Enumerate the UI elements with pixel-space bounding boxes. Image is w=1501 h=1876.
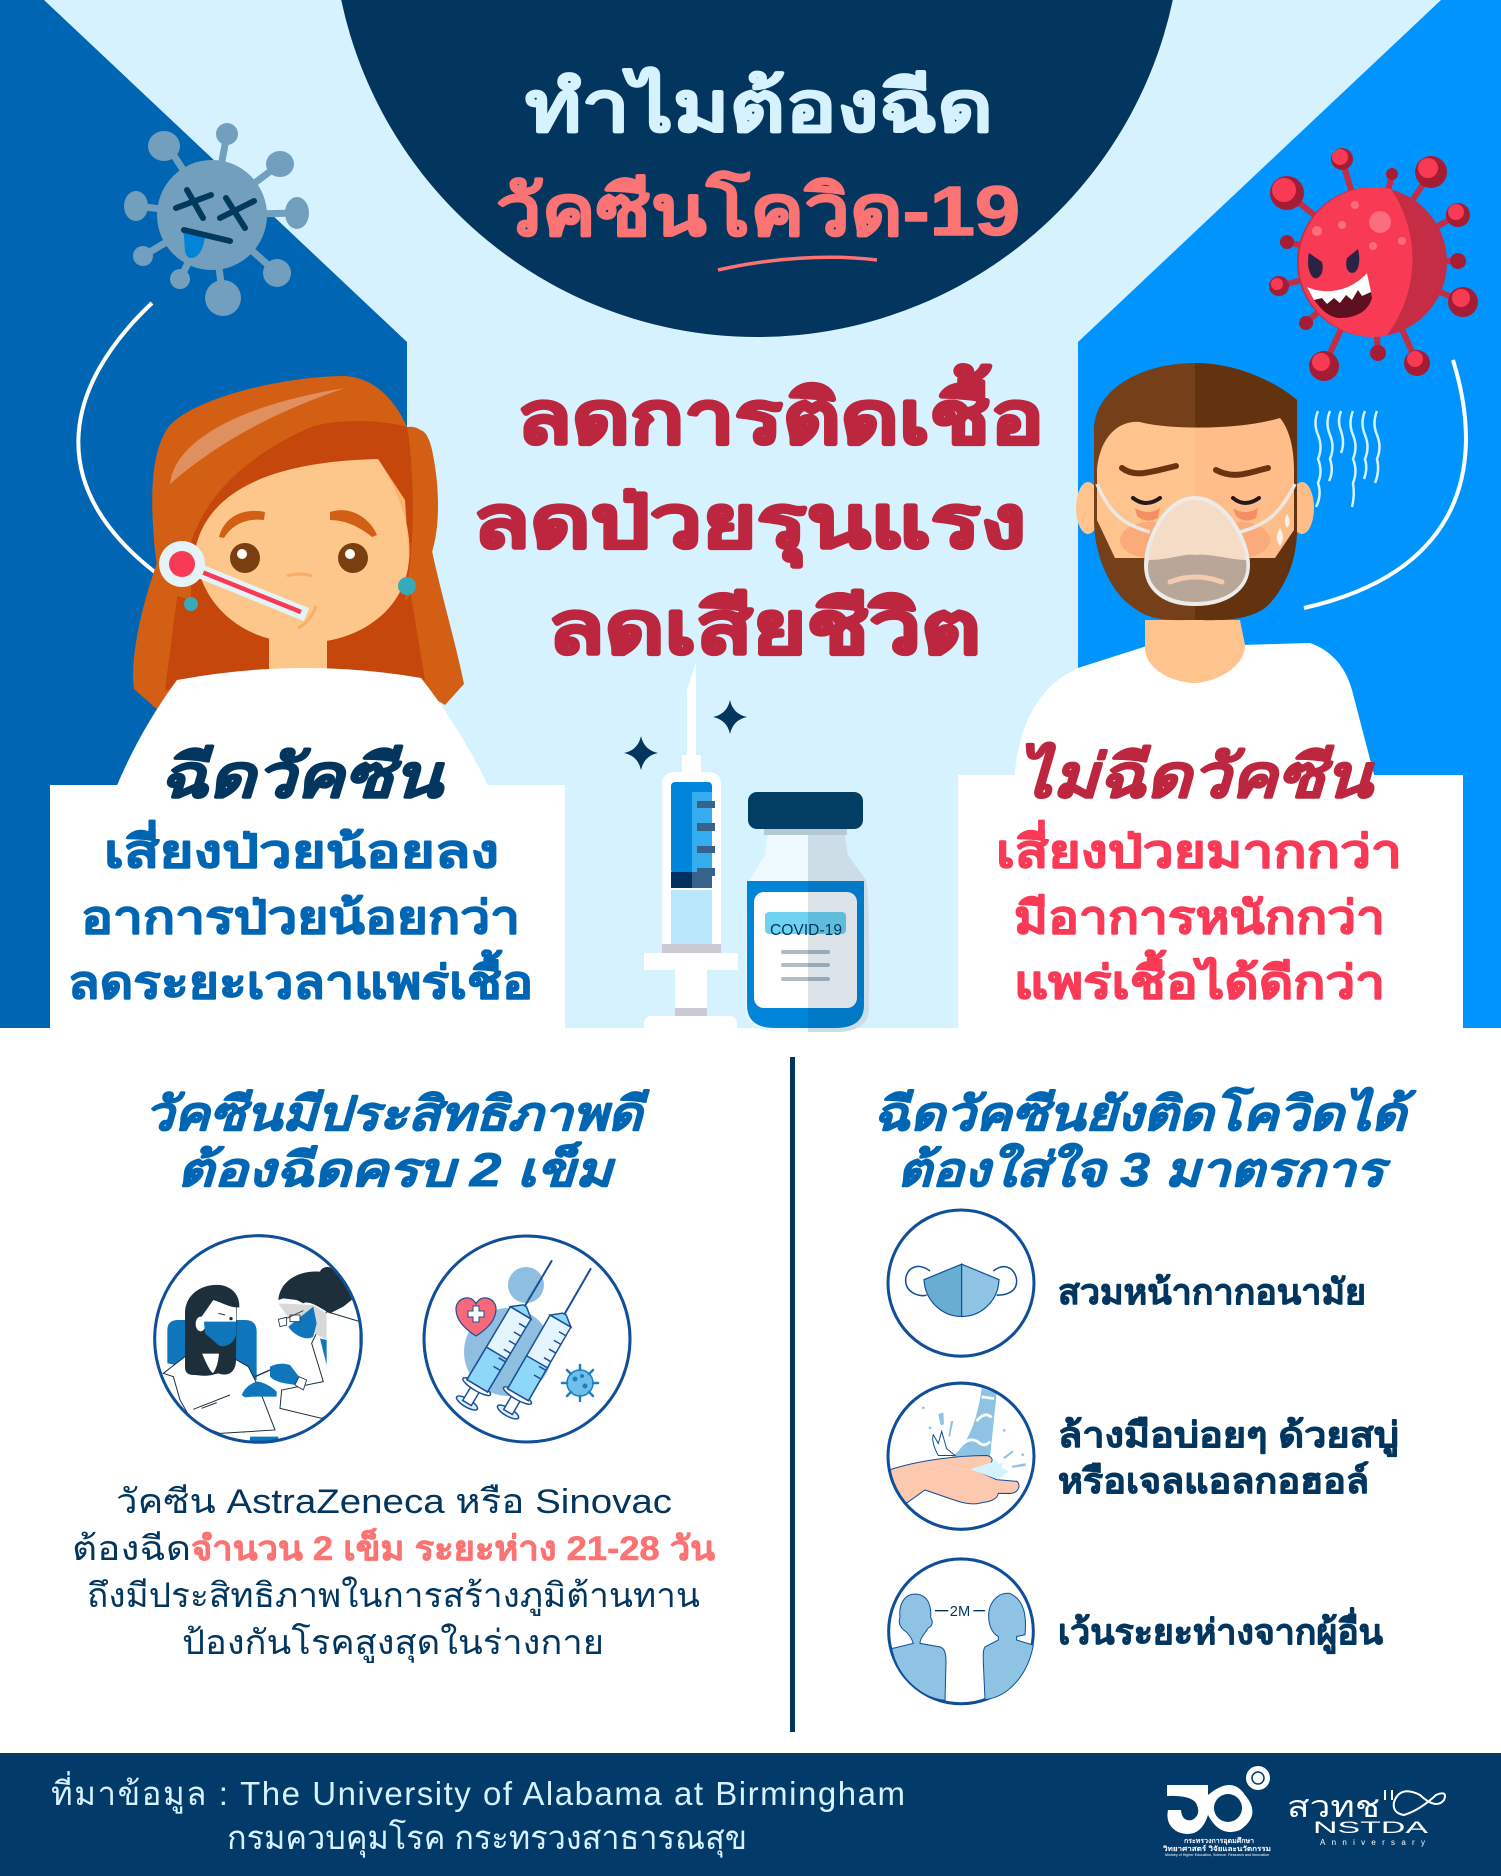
logo: NSTDA (1287, 1790, 1445, 1847)
panel: vaccinated (50, 743, 565, 1028)
right half shade (1195, 363, 1297, 620)
right blue panel (1078, 0, 1501, 1028)
white arc right (1304, 360, 1466, 608)
heading: three measures (873, 1086, 1417, 1196)
logo: ministry (1162, 1766, 1271, 1857)
main heading: ลดการติดเชื้อ (517, 364, 1044, 459)
dark title circle (332, 0, 1182, 337)
divider (790, 1057, 795, 1732)
text: dose explanation (72, 1483, 715, 1663)
heading: two doses: ต้องฉีดครบ 2 เข็ม (177, 1141, 616, 1196)
benefits: ลดระยะเวลาแพร่เชื้อ (68, 949, 533, 1008)
lower white area (0, 1028, 1501, 1753)
risks (996, 820, 1402, 1008)
text: dose explanation: ป้องกันโรคสูงสุดในร่างกาย (182, 1623, 604, 1663)
main heading (473, 364, 1044, 669)
icon: vaccine bottle (746, 792, 869, 1032)
icon: angry virus (1269, 148, 1478, 381)
woman with thermometer (115, 376, 490, 790)
heading: two doses: วัคซีนมีประสิทธิภาพดี (144, 1087, 650, 1140)
icon: patient and doctor (155, 1236, 361, 1443)
distance label: 2M (950, 1603, 970, 1620)
text: dose explanation: วัคซีน AstraZeneca หรือ Sinovac (116, 1483, 672, 1521)
text: dose explanation: จำนวน 2 เข็ม ระยะห่าง 21-28 วัน (191, 1527, 715, 1568)
text: measure labels: เว้นระยะห่างจากผู้อื่น (1058, 1607, 1383, 1654)
logo: NSTDA: สวทช (1287, 1791, 1380, 1824)
text: measure labels (1058, 1273, 1399, 1654)
oxygen mask (1097, 484, 1295, 532)
title: ทำไมต้องฉีด (525, 66, 993, 146)
white arc left (78, 303, 160, 576)
icon: syringe (644, 662, 738, 1028)
heading: three measures: ต้องใส่ใจ 3 มาตรการ (897, 1143, 1392, 1196)
shirt (1014, 643, 1378, 790)
logo: ministry: Ministry of Higher Education, Science, Research and Innovation (1165, 1853, 1269, 1857)
thermometer (182, 564, 300, 612)
main heading: ลดป่วยรุนแรง (473, 482, 1026, 568)
neck (269, 630, 327, 675)
icon: face mask (888, 1210, 1034, 1356)
benefits: อาการป่วยน้อยกว่า (81, 892, 520, 943)
man with oxygen mask (1014, 363, 1378, 790)
title: วัคซีนโควิด-19 (496, 170, 1020, 250)
icon: syringes, heart and virus (424, 1236, 630, 1442)
risks: มีอาการหนักกว่า (1014, 892, 1385, 943)
text: measure labels: สวมหน้ากากอนามัย (1058, 1273, 1366, 1312)
text: dose explanation: ถึงมีประสิทธิภาพในการสร้างภูมิต้านทาน (87, 1576, 700, 1616)
left blue panel (0, 0, 407, 1028)
text: dose explanation: ต้องฉีด (72, 1530, 191, 1568)
title (496, 66, 1020, 270)
label text: COVID-19 (770, 922, 842, 939)
sweat lines (1316, 411, 1380, 507)
source text: ที่มาข้อมูล : The University of Alabama at Birmingham (51, 1771, 905, 1814)
logo: ministry: กระทรวงการอุดมศึกษา (1184, 1836, 1254, 1845)
icon: two metre distance (889, 1559, 1033, 1704)
benefits (68, 820, 533, 1008)
background panel (0, 0, 1501, 1028)
risks: แพร่เชื้อได้ดีกว่า (1014, 949, 1385, 1008)
benefits: เสี่ยงป่วยน้อยลง (104, 820, 499, 877)
risks: เสี่ยงป่วยมากกว่า (996, 820, 1402, 877)
logo: NSTDA: NSTDA (1313, 1818, 1429, 1837)
heading: ไม่ฉีดวัคซีน (1017, 742, 1375, 810)
heading: three measures: ฉีดวัคซีนยังติดโควิดได้ (873, 1086, 1417, 1140)
footer bar (0, 1753, 1501, 1876)
heading: two doses (144, 1087, 650, 1196)
panel: unvaccinated (958, 742, 1463, 1028)
source text: กรมควบคุมโรค กระทรวงสาธารณสุข (227, 1819, 747, 1858)
source text (51, 1771, 905, 1858)
logo: ministry: วิทยาศาสตร์ วิจัยและนวัตกรรม (1162, 1844, 1271, 1853)
text: measure labels: ล้างมือบ่อยๆ ด้วยสบู่ (1058, 1416, 1399, 1457)
icon: sparkles (624, 700, 747, 770)
text: measure labels: หรือเจลแอลกอฮอล์ (1058, 1461, 1369, 1501)
icon: hand washing (887, 1383, 1034, 1529)
icon: defeated virus (124, 123, 309, 316)
shirt (115, 668, 490, 790)
main heading: ลดเสียชีวิต (548, 588, 981, 669)
heading: ฉีดวัคซีน (159, 743, 446, 810)
logo: NSTDA: Anniversary (1320, 1838, 1425, 1847)
